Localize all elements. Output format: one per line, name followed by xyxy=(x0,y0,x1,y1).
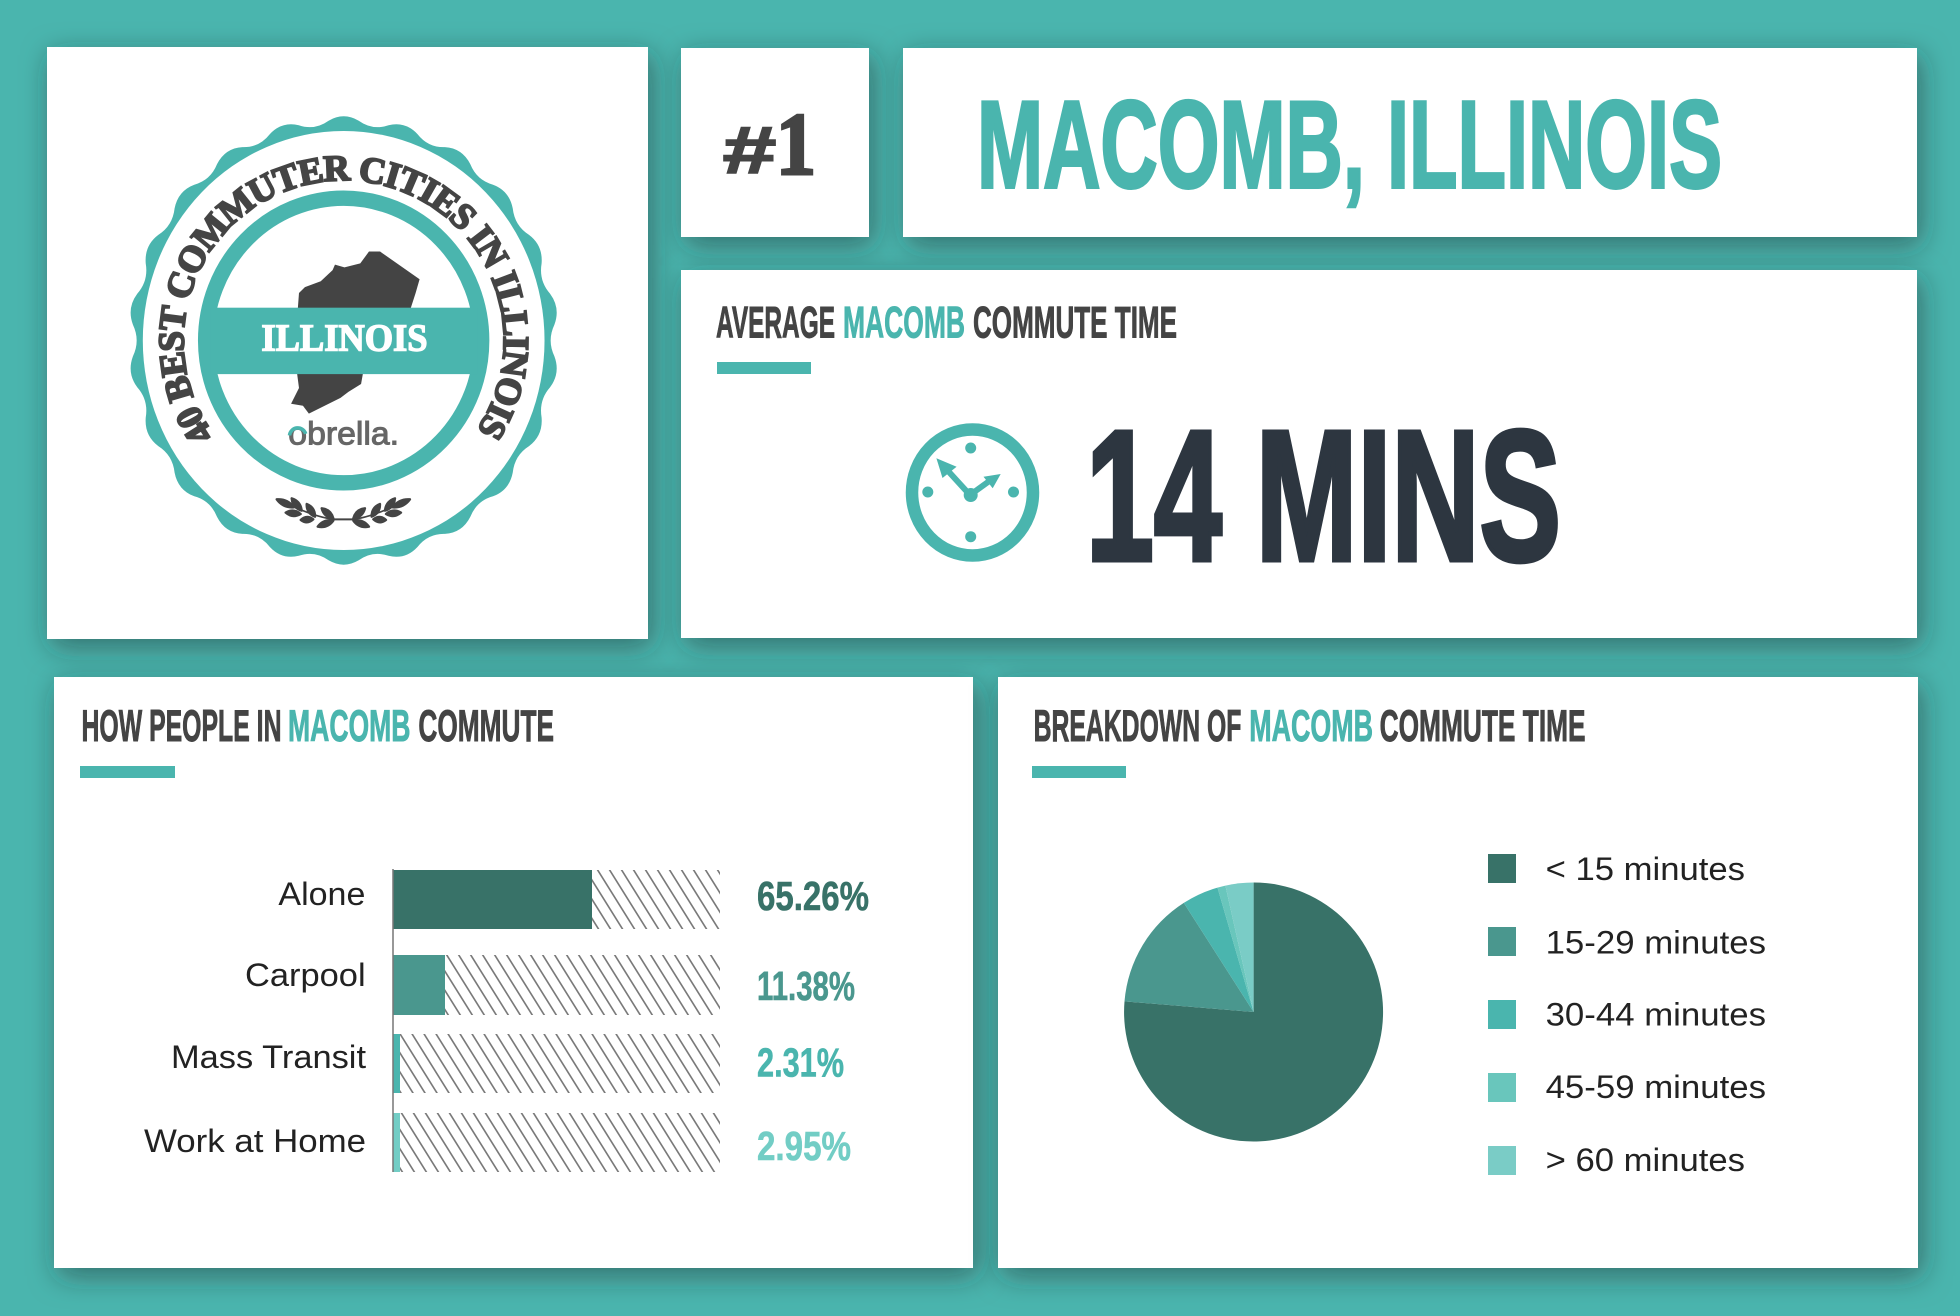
legend: 15-29 minutes xyxy=(1546,924,1766,960)
pie chart xyxy=(1124,882,1383,1142)
bar: mass transit: Mass Transit xyxy=(171,1039,366,1075)
big value: 14 MINS xyxy=(1086,393,1561,600)
panel: average commute time xyxy=(681,270,1917,638)
bar: carpool xyxy=(245,955,855,1015)
panel: rank xyxy=(681,48,869,237)
heading xyxy=(1034,702,1586,751)
heading: COMMUTE TIME xyxy=(973,298,1177,347)
legend: 30-44 minutes xyxy=(1546,996,1766,1032)
rank number: # xyxy=(723,113,776,187)
inner ring xyxy=(206,198,482,483)
heading xyxy=(716,298,1177,347)
heading: BREAKDOWN OF xyxy=(1034,702,1241,751)
icon: laurel xyxy=(277,498,410,527)
icon: Illinois silhouette xyxy=(291,252,420,414)
bar: work at home: Work at Home xyxy=(144,1123,366,1159)
heading underline xyxy=(80,766,175,778)
heading: COMMUTE xyxy=(418,702,554,751)
legend: 45-59 minutes xyxy=(1546,1069,1766,1105)
heading: MACOMB xyxy=(288,702,410,751)
bar: alone: Alone xyxy=(278,876,365,912)
legend: < 15 minutes xyxy=(1546,851,1745,887)
bar: work at home xyxy=(144,1113,851,1172)
arc text: 40 BEST COMMUTER CITIES IN ILLINOIS xyxy=(158,156,529,441)
panel: commute time breakdown xyxy=(998,677,1918,1268)
bar: alone xyxy=(278,870,869,929)
heading: MACOMB xyxy=(1249,702,1373,751)
band label: ILLINOIS xyxy=(261,318,427,359)
legend: > 60 minutes xyxy=(1546,1142,1745,1178)
rank number xyxy=(723,96,816,194)
logo: obrella: obrella. xyxy=(288,415,399,451)
panel: seal xyxy=(32,36,670,666)
heading: HOW PEOPLE IN xyxy=(82,702,282,751)
icon: clock xyxy=(912,430,1033,556)
heading underline xyxy=(1032,766,1126,778)
bar chart xyxy=(144,869,869,1172)
bar: alone: 65.26% xyxy=(757,873,869,919)
bar: carpool: 11.38% xyxy=(757,963,855,1009)
seal badge xyxy=(130,116,557,565)
scalloped seal edge xyxy=(131,116,557,565)
band xyxy=(210,308,477,374)
heading: COMMUTE TIME xyxy=(1380,702,1586,751)
rank number: 1 xyxy=(776,96,816,194)
heading underline xyxy=(717,362,811,374)
panel: city title xyxy=(903,48,1917,237)
bar: work at home: 2.95% xyxy=(757,1123,851,1169)
legend xyxy=(1488,851,1766,1178)
heading: MACOMB xyxy=(843,298,965,347)
bar: mass transit: 2.31% xyxy=(757,1040,844,1086)
bar: mass transit xyxy=(171,1034,844,1093)
heading: AVERAGE xyxy=(716,298,835,347)
bar: carpool: Carpool xyxy=(245,957,366,993)
panel: how people commute xyxy=(54,677,973,1268)
axis xyxy=(392,869,394,1172)
